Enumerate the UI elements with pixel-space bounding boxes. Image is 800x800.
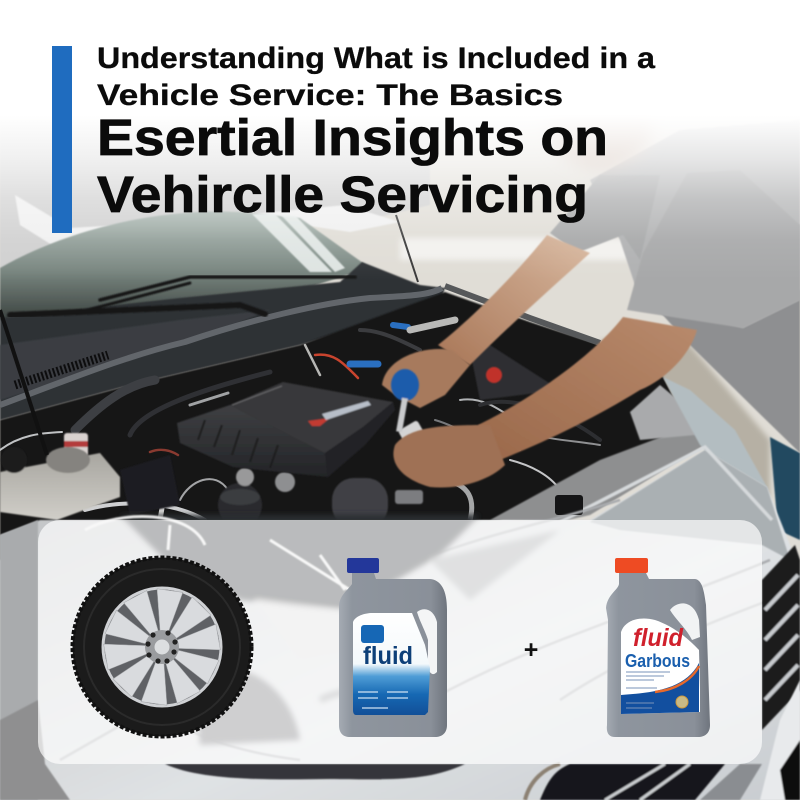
subtitle: Vehicle Service: The Basics [97,79,563,112]
mechanic's shirt upper body [590,120,800,328]
front grille [762,545,800,730]
engine bay [0,292,695,560]
lower arm [478,317,697,460]
engine cover [177,382,395,477]
hub with lug nuts [145,630,179,664]
plus sign: + [524,636,538,664]
upper hand [382,349,470,408]
spokes [104,589,220,705]
fine print [358,692,408,708]
engine parts [120,420,424,528]
tread [72,558,252,736]
jug body [339,573,447,737]
ghost pipes through panel [85,516,420,600]
hood lip highlight [560,447,772,522]
inner fender plate [490,425,705,522]
subtitle: Understanding What is Included in a [97,42,655,75]
bonnet white lip [15,195,400,250]
label [621,618,700,714]
left body shade [0,520,38,800]
main heading [97,109,608,223]
brand word: fluid [633,624,684,652]
fender cutout panel [630,385,695,440]
cap [615,558,648,573]
hood shaded top [590,450,790,560]
subtitle [97,42,655,112]
bonnet strut [396,215,418,282]
title block [52,42,655,233]
front hood and car body [0,450,800,800]
silver fender lip [663,377,777,525]
intake tube and hoses [0,320,600,520]
shirt sleeve [627,170,800,328]
round seal [676,696,688,708]
blue accent bar [52,46,72,233]
blue tool handle [391,369,419,432]
logo badge [361,625,384,643]
vent grille [15,355,108,385]
fluid bottle (red cap) [606,558,710,737]
upper arm [438,235,590,365]
main heading: Vehirclle Servicing [97,166,588,223]
cowl highlight strip [0,288,442,405]
headlight crescent [165,764,465,779]
handle hole [670,603,700,640]
shirt near sleeve [550,175,660,260]
red terminal [486,367,502,383]
floor and lower wall [600,340,770,500]
fine print [626,672,670,708]
icon: tyre [72,558,252,736]
main heading: Esertial Insights on [97,109,608,166]
black plug [555,495,583,515]
mechanic's shirt lower body [640,290,800,453]
white fade behind title [0,0,800,280]
wipers [10,277,355,315]
label blue base [621,663,699,714]
wall light band [400,238,630,260]
dark battery cover at right [470,345,560,400]
windshield reflections [252,214,345,272]
translucent product panel [38,520,762,764]
hood crease lines [60,500,770,760]
rim [103,588,221,706]
left dark wedge of body [0,700,70,800]
label [353,613,430,715]
cowl lower tone [0,310,270,400]
mechanic's head [548,83,652,167]
lower grille and bumper [525,680,800,800]
cowl panel [0,262,445,420]
cap [347,558,379,573]
handle hole [417,609,437,674]
open bonnet underside [0,120,430,270]
product name: Garbous [625,651,690,671]
jeans [770,437,800,540]
bay upper-right rim [445,286,600,343]
engine bay seen through panel [120,515,560,745]
orange swoosh [655,666,699,692]
brand word: fluid [363,642,413,670]
fluid bottle (blue cap) [339,558,447,737]
lower hand [393,425,505,488]
bonnet prop rod [0,310,47,455]
windshield [0,211,370,320]
jug body [606,573,710,737]
coolant reservoir [0,433,120,520]
